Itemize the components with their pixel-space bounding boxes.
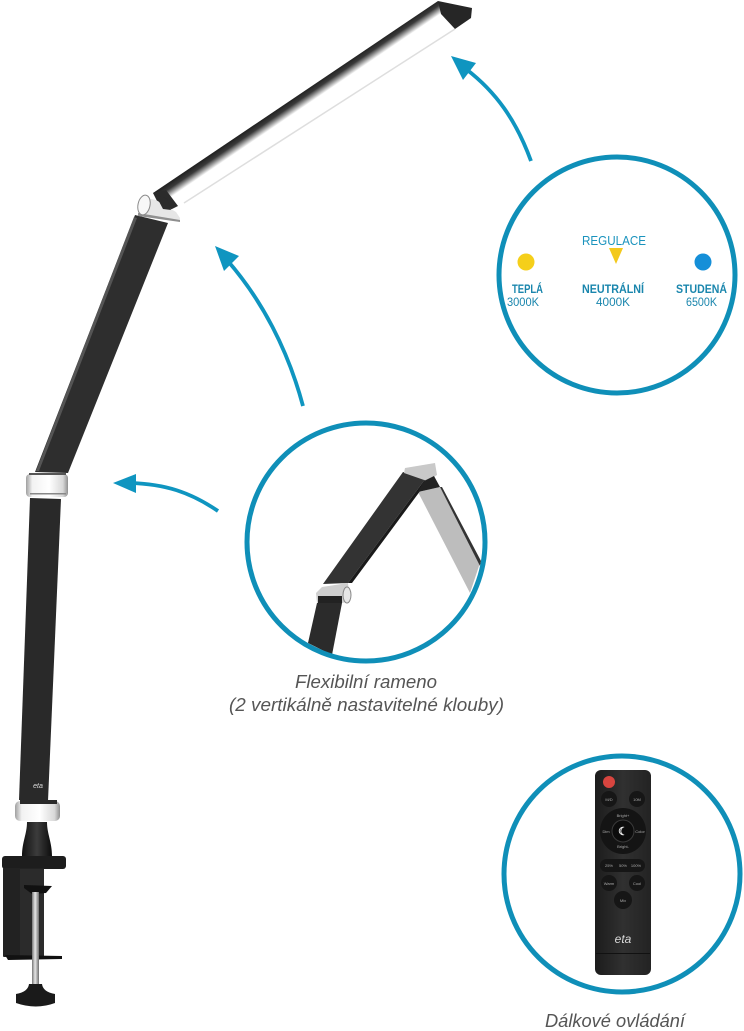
brightness pill: 25% [605,863,613,868]
upper arm [35,215,168,473]
middle joint [26,473,68,497]
warm, cool and mix buttons: Warm [604,881,615,886]
label: warm: TEPLÁ [512,283,543,296]
arrow: to lamp head [451,56,531,161]
warm, cool and mix buttons [601,875,645,909]
label: warm: 3000K [507,297,539,309]
panel: colour temperature [499,157,735,393]
heading: regulace: REGULACE [582,233,646,248]
lamp head with LED panel [153,1,456,211]
lower arm segment [308,603,342,655]
direction ring: Bright- [617,844,630,849]
silver arm underside [418,487,481,593]
caption: flexible arm [229,672,504,715]
mode and timer buttons [601,791,645,807]
icon: warm dot [518,254,534,270]
direction ring: ☾ [618,826,628,838]
desk clamp [2,856,66,960]
warm, cool and mix buttons: Cool [633,881,641,886]
arrow: to middle joint [113,474,218,511]
circle outline [247,423,485,661]
direction ring: Dim [602,829,610,834]
lower arm [19,498,61,801]
direction ring [600,808,646,854]
caption: flexible arm: Flexibilní rameno [295,672,437,692]
caption: flexible arm: (2 vertikálně nastavitelné klouby) [229,695,504,715]
label: cool: STUDENÁ [676,283,727,296]
label: neutral: NEUTRÁLNÍ [582,283,645,296]
label: cool: 6500K [686,297,717,309]
circle outline [499,157,735,393]
lower joint [15,800,60,821]
eta logo: eta [615,932,632,946]
direction ring: Color [635,829,645,834]
ball stem [22,822,52,856]
label: neutral [582,283,645,309]
caption: remote control: Dálkové ovládání [545,1011,687,1031]
warm, cool and mix buttons: Mix [620,898,626,903]
mode and timer buttons: 10M [633,797,641,802]
remote body [595,770,651,975]
label: neutral: 4000K [596,297,630,309]
brightness pill: 100% [631,863,642,868]
clamp knob [16,984,55,1006]
mode and timer buttons: M/D [605,797,613,802]
icon: cool dot [694,254,712,270]
brightness pill [600,859,645,872]
label: cool [676,283,727,309]
brightness pill: 50% [619,863,627,868]
circle outline [504,756,740,992]
lamp head end cap [438,1,472,29]
lamp [2,1,472,1006]
upper joint [136,194,180,222]
panel: flexible arm detail [247,423,485,661]
panel: remote control [504,756,740,992]
power button [603,776,615,788]
direction ring: Bright+ [617,813,630,818]
icon: yellow marker [609,248,623,264]
lower joint detail [316,583,351,603]
dark arm segment [323,472,429,584]
label: warm [507,283,543,309]
upper joint detail [404,463,440,492]
clamp screw rod [32,892,39,984]
arrow: to upper joint [215,246,303,406]
eta logo on arm: eta [33,783,43,790]
